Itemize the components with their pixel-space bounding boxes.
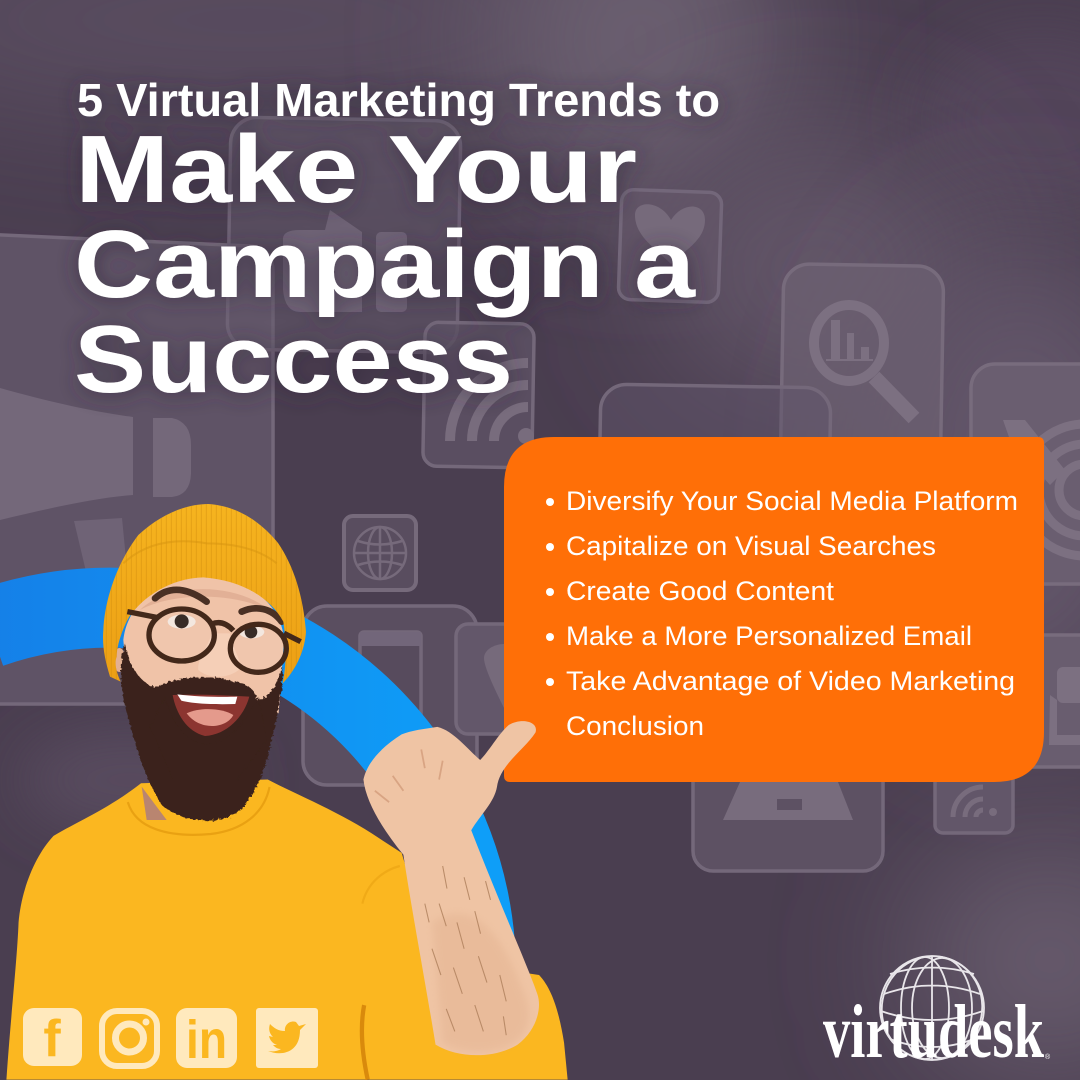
icon tile: laptop	[693, 740, 883, 871]
title: 5 Virtual Marketing Trends to	[77, 74, 720, 126]
icon tile: wide card	[599, 384, 831, 498]
bullet list: Diversify Your Social Media Platform	[566, 486, 1018, 516]
icon tile: phone	[303, 606, 477, 785]
icon: facebook	[23, 1008, 82, 1068]
body and arm	[6, 721, 568, 1080]
icon tile: rss	[423, 322, 534, 468]
icon tile: heart	[618, 189, 722, 303]
blue arc	[0, 608, 475, 945]
forearm shade	[432, 914, 529, 1051]
title: Make Your	[75, 116, 637, 223]
arm and fist	[363, 721, 539, 1055]
beard	[121, 643, 283, 821]
nose	[198, 633, 241, 677]
head	[103, 504, 306, 821]
eyebrows	[155, 590, 282, 622]
icon: instagram	[102, 1011, 157, 1066]
sweater	[6, 780, 568, 1080]
mouth	[173, 694, 249, 736]
eyes	[168, 614, 264, 638]
icon: twitter	[256, 1008, 318, 1068]
logo: virtudesk	[823, 942, 1051, 1074]
social icons	[23, 1008, 318, 1070]
bullet list: Make a More Personalized Email	[566, 621, 972, 651]
title: Campaign a	[74, 211, 696, 318]
man pointing with thumb	[6, 504, 568, 1080]
title: Success	[74, 306, 513, 413]
forehead shade	[140, 589, 273, 613]
icon tile: target	[971, 364, 1080, 584]
logo globe	[867, 942, 997, 1074]
glasses	[127, 609, 301, 672]
ear	[113, 648, 125, 672]
icon tile: globe	[344, 516, 416, 590]
logo: virtudesk: ®	[1045, 1053, 1051, 1061]
icon tile: small rss	[935, 760, 1013, 833]
icon: linkedin: in	[186, 1010, 227, 1070]
bullet list: Capitalize on Visual Searches	[566, 531, 936, 561]
bullet list: Create Good Content	[566, 576, 835, 606]
icon: facebook: f	[43, 1010, 61, 1068]
chin patch beard	[150, 697, 267, 780]
icon tile: chat card	[1012, 635, 1080, 767]
beanie	[103, 504, 306, 683]
panel: orange trends list	[504, 437, 1044, 782]
bullet list: Conclusion	[566, 711, 704, 741]
bullet list	[546, 486, 1018, 741]
arm hair	[375, 749, 506, 1035]
icon tile: map pin	[456, 624, 518, 734]
title	[74, 74, 720, 413]
icon tile: thumbs up card	[227, 117, 461, 353]
bullet list: Take Advantage of Video Marketing	[566, 666, 1015, 696]
icon tile: megaphone card	[0, 234, 273, 704]
icon tile: search analytics	[780, 264, 944, 496]
sweater shading	[128, 787, 400, 1080]
face	[123, 576, 284, 713]
neck	[142, 787, 167, 820]
